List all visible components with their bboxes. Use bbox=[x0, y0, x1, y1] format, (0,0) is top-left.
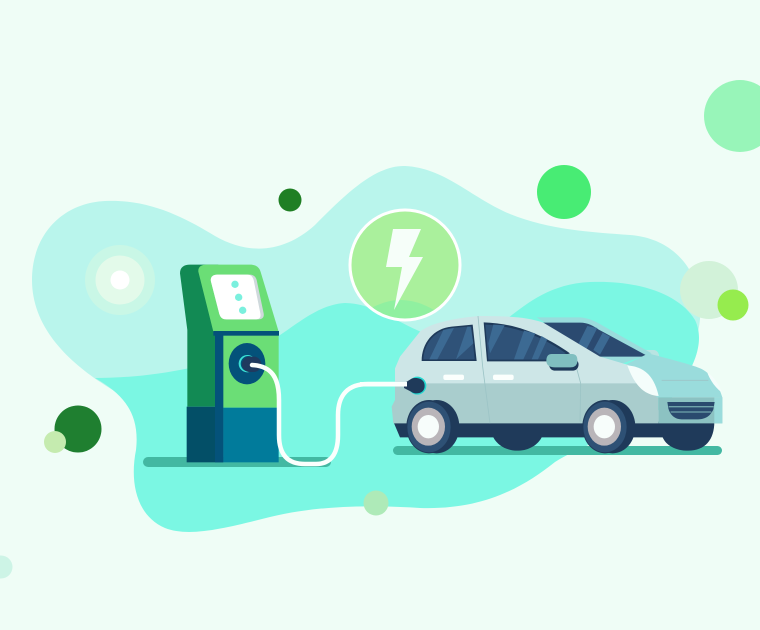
decorative circle: dark green top bbox=[278, 188, 302, 212]
sun glow bbox=[85, 245, 155, 315]
rear window bbox=[422, 325, 477, 361]
ground shadow: car bbox=[393, 446, 722, 455]
station base front bbox=[223, 408, 279, 462]
far window bbox=[542, 323, 649, 357]
front wheel bbox=[582, 400, 635, 453]
body upper bbox=[395, 316, 639, 383]
station base side bbox=[187, 407, 223, 462]
door handles bbox=[443, 375, 514, 380]
window reflections bbox=[429, 325, 547, 359]
decorative circle: mint top right bbox=[704, 80, 760, 152]
hood bbox=[625, 353, 722, 397]
far side roof bbox=[537, 317, 652, 367]
car charging plug bbox=[404, 377, 426, 395]
ground shadow: charger bbox=[143, 457, 331, 467]
station screen bbox=[211, 275, 264, 319]
headlight bbox=[627, 365, 659, 396]
socket bbox=[229, 343, 265, 384]
front window bbox=[484, 322, 570, 361]
side mirror bbox=[546, 354, 579, 371]
door lines bbox=[478, 316, 708, 423]
rear wheel bbox=[406, 400, 459, 453]
station head bbox=[198, 265, 279, 332]
station strip bbox=[215, 332, 223, 462]
front grille bbox=[667, 402, 715, 419]
decorative circles: left pair bbox=[44, 406, 102, 453]
decorative circle: bottom green bbox=[364, 490, 388, 516]
station band bbox=[213, 331, 279, 336]
far window reflections bbox=[579, 326, 610, 355]
decorative circles: right pair bbox=[680, 261, 748, 320]
front bumper panel bbox=[658, 397, 722, 423]
cable end bbox=[360, 382, 407, 386]
charging cable bbox=[252, 365, 408, 464]
screen white bbox=[211, 275, 260, 319]
station body front bbox=[215, 332, 279, 408]
decorative circle: bottom left bbox=[0, 556, 12, 578]
pale teal blob bbox=[32, 166, 700, 470]
underbody bbox=[393, 422, 714, 451]
bolt badge bbox=[348, 208, 462, 322]
decorative circle: bright green bbox=[537, 165, 591, 219]
station back side bbox=[180, 265, 218, 407]
illustration: electric car charging bbox=[0, 80, 760, 578]
bright teal blob bbox=[95, 282, 699, 532]
body lower bbox=[392, 382, 658, 423]
icon: lightning bolt bbox=[386, 229, 423, 310]
charging station bbox=[180, 265, 279, 462]
plug bbox=[242, 357, 261, 372]
far side mirror bbox=[643, 350, 659, 358]
screen dots bbox=[231, 281, 246, 314]
car bbox=[392, 316, 722, 453]
